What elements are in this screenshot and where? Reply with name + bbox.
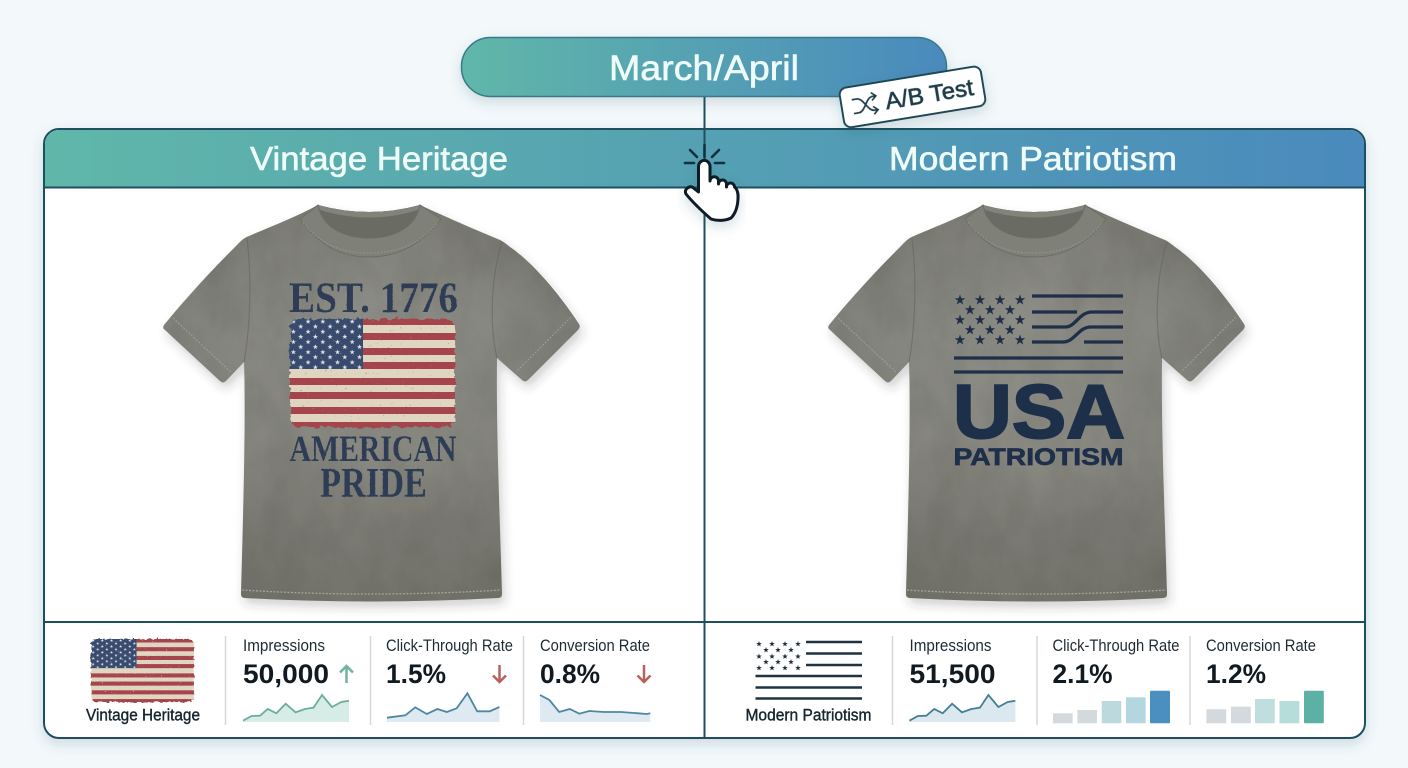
- shirt text: AMERICAN: AMERICAN: [290, 429, 457, 470]
- shirt text: USA: USA: [953, 370, 1125, 455]
- metric: conversion rate: [540, 636, 650, 722]
- icon: shuffle: [851, 92, 879, 118]
- metric: conversion rate: Conversion Rate: [1206, 636, 1316, 655]
- metrics row: Vintage Heritage: [85, 634, 650, 725]
- heading: Vintage Heritage: Vintage Heritage: [250, 140, 508, 177]
- metric: impressions: 51,500: [910, 659, 996, 689]
- shirt body: [828, 205, 1245, 602]
- mini vintage flag: [85, 634, 200, 707]
- metric: conversion rate: Conversion Rate: [540, 636, 650, 655]
- metric: click-through rate: [1052, 636, 1180, 723]
- metric: impressions: Impressions: [243, 636, 325, 655]
- bar chart: conversion rate: [1206, 691, 1324, 723]
- left t-shirt: vintage design: [163, 205, 580, 602]
- shirt text: PRIDE: PRIDE: [320, 461, 427, 507]
- metric: click-through rate: Click-Through Rate: [1052, 636, 1180, 655]
- date pill: March/April: [462, 38, 946, 96]
- panel body: [44, 129, 1365, 738]
- metric: conversion rate: 1.2%: [1206, 659, 1266, 689]
- variant label: Vintage Heritage: [86, 706, 200, 724]
- date pill: March/April: March/April: [609, 49, 799, 88]
- metric: impressions: 50,000: [243, 659, 329, 689]
- heading: Modern Patriotism: Modern Patriotism: [889, 140, 1177, 177]
- metric: conversion rate: [1206, 636, 1324, 723]
- metric: conversion rate: 0.8%: [540, 659, 600, 689]
- metric: impressions: Impressions: [910, 636, 992, 655]
- metric: click-through rate: 1.5%: [386, 659, 446, 689]
- badge: A/B Test: [839, 66, 986, 128]
- metric: click-through rate: Click-Through Rate: [386, 636, 513, 655]
- shirt text: PATRIOTISM: PATRIOTISM: [954, 444, 1124, 471]
- shirt stars: [955, 294, 1025, 344]
- badge text: A/B Test: [883, 74, 976, 114]
- right t-shirt: modern design: [828, 205, 1245, 602]
- metric: click-through rate: 2.1%: [1052, 659, 1112, 689]
- metrics row: Modern Patriotism: [746, 636, 1324, 725]
- metric: impressions: [243, 636, 353, 722]
- comparison panel: [44, 97, 1365, 738]
- variant label: Modern Patriotism: [746, 706, 872, 724]
- metric: impressions: [909, 636, 1015, 722]
- icon: pointing hand cursor with click sparks: [685, 145, 738, 220]
- shirt flag stripes: [954, 296, 1123, 372]
- shirt flag: [280, 310, 465, 435]
- mini modern flag: [756, 641, 862, 698]
- shirt body: [163, 205, 580, 602]
- panel header band: [45, 130, 1364, 187]
- metric: click-through rate: [386, 636, 513, 722]
- bar chart: click-through rate: [1053, 691, 1170, 723]
- shirt text: EST. 1776: EST. 1776: [289, 275, 458, 322]
